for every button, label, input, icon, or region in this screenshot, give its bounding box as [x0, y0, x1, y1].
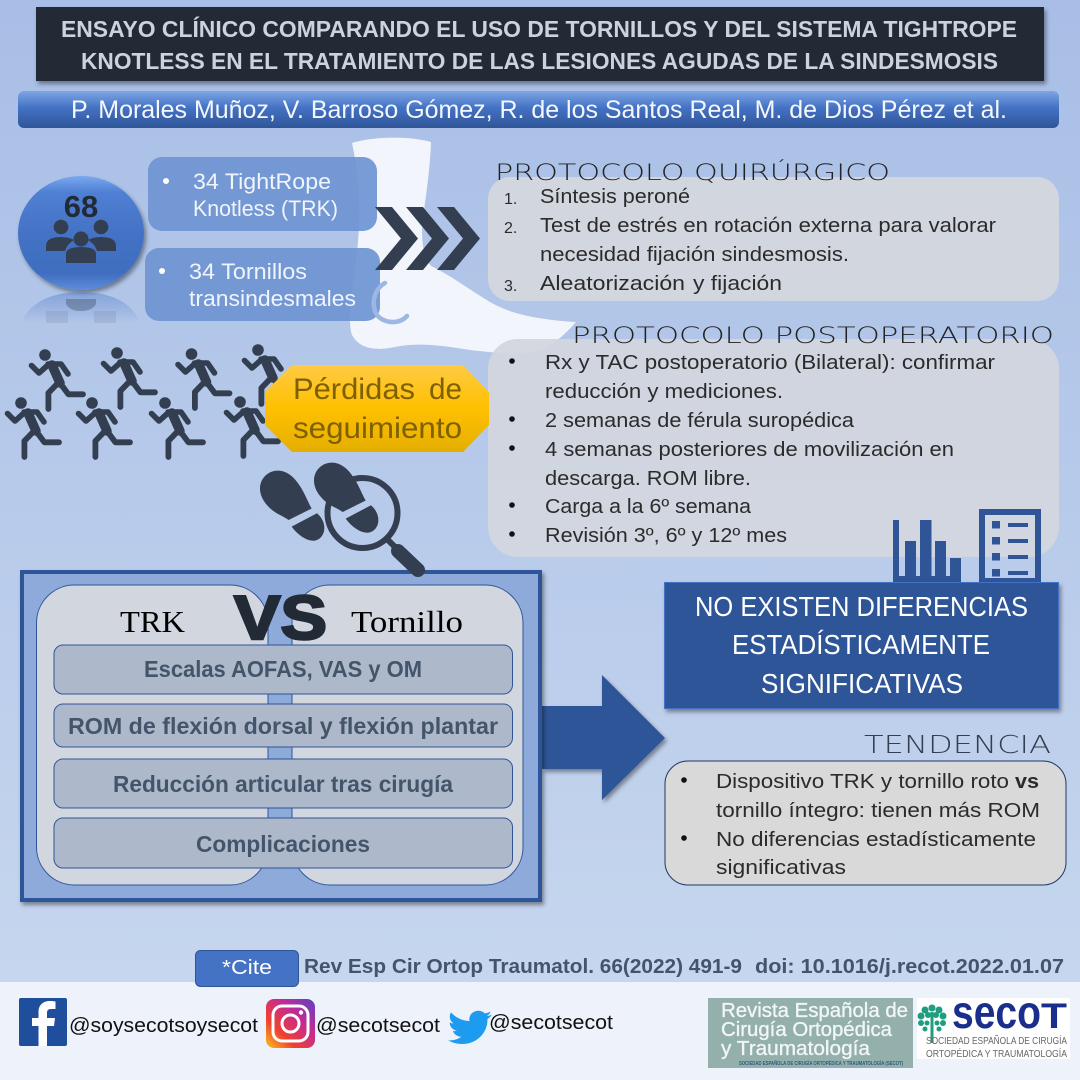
arrow: to conclusion	[542, 675, 665, 800]
icon: patients circle 68	[18, 176, 144, 323]
list: surgical steps: necesidad fijación sindesmosis.	[540, 244, 849, 266]
row: complications	[54, 818, 512, 868]
list: postoperative steps: Revisión 3º, 6º y 12º mes	[545, 525, 787, 547]
list: postoperative steps: 2 semanas de férula suropédica	[545, 410, 855, 432]
list: postoperative steps	[509, 352, 995, 547]
icon: instagram	[266, 999, 315, 1048]
panel: trend: tornillo íntegro: tienen más ROM	[716, 800, 1040, 822]
row: joint reduction: Reducción articular tras cirugía	[113, 771, 453, 797]
icon: facebook	[19, 998, 67, 1046]
handle: facebook: @soysecotsoysecot	[69, 1015, 258, 1037]
list: surgical steps: y fijación	[693, 273, 782, 295]
panel: conclusion	[664, 582, 1058, 708]
panel: TRK group: 34 TightRope	[193, 169, 331, 194]
authors bar	[18, 91, 1059, 128]
callout: lost to follow-up: seguimiento	[293, 412, 462, 445]
icon: twitter	[448, 1011, 492, 1044]
panel: trend: vs	[1015, 771, 1039, 793]
title: KNOTLESS EN EL TRATAMIENTO DE LAS LESIONES AGUDAS DE LA SINDESMOSIS	[81, 48, 998, 74]
row: complications: Complicaciones	[196, 831, 370, 857]
list: postoperative steps: 4 semanas posteriores de movilización en	[545, 439, 954, 461]
panel: conclusion: SIGNIFICATIVAS	[761, 668, 963, 699]
label: TRK: TRK	[120, 604, 186, 639]
button: cite: *Cite	[222, 957, 272, 979]
logo: journal: SOCIEDAD ESPAÑOLA DE CIRUGÍA ORTOPÉDICA Y TRAUMATOLOGÍA (SECOT)	[739, 1059, 903, 1067]
column: screw	[292, 585, 523, 885]
heading: trend: TENDENCIA	[864, 730, 1051, 759]
logo: journal: Cirugía Ortopédica	[721, 1019, 893, 1041]
handle: instagram: @secotsecot	[316, 1015, 440, 1037]
logo: journal: Revista Española de	[721, 1000, 908, 1022]
list: postoperative steps: Carga a la 6º semana	[545, 496, 752, 518]
list: postoperative steps: descarga. ROM libre.	[545, 468, 751, 490]
panel: trend	[665, 761, 1066, 885]
logo: SECOT	[917, 986, 1070, 1060]
panel: conclusion: ESTADÍSTICAMENTE	[732, 629, 990, 660]
button: cite	[196, 950, 298, 986]
panel: screw group: 34 Tornillos	[189, 259, 307, 284]
logo: SECOT: seco	[952, 986, 1041, 1038]
callout: lost to follow-up: de	[429, 373, 462, 406]
panel: trend: significativas	[716, 857, 846, 879]
icon: foot silhouette	[350, 138, 576, 353]
title: ENSAYO CLÍNICO COMPARANDO EL USO DE TORNILLOS Y DEL SISTEMA TIGHTROPE	[61, 15, 1017, 42]
icon: bar chart	[893, 520, 961, 582]
panel: conclusion: NO EXISTEN DIFERENCIAS	[695, 591, 1028, 622]
label: VS: VS	[234, 584, 327, 653]
row: ROM	[54, 704, 512, 747]
list: surgical steps	[504, 186, 996, 295]
icon: document list	[979, 509, 1041, 584]
icon: footprints and magnifier	[252, 455, 418, 570]
logo: journal: y Traumatología	[721, 1038, 871, 1060]
authors bar: P. Morales Muñoz, V. Barroso Gómez, R. de los Santos Real, M. de Dios Pérez et al.	[71, 96, 1007, 124]
panel: TRK group	[148, 157, 377, 231]
citation	[304, 956, 1064, 978]
list: surgical steps: 1.	[504, 191, 517, 208]
row: ROM: ROM de flexión dorsal y flexión plantar	[68, 713, 498, 739]
callout: lost to follow-up	[265, 365, 489, 452]
panel: screw group: transindesmales	[189, 286, 356, 311]
row: joint reduction	[54, 759, 512, 808]
row: scales: Escalas AOFAS, VAS y OM	[144, 656, 422, 682]
callout: lost to follow-up: Pérdidas	[293, 373, 415, 406]
row: scales	[54, 645, 512, 694]
logo: journal	[708, 998, 913, 1068]
icon: tree	[918, 1004, 946, 1043]
label: Tornillo: Tornillo	[351, 604, 463, 639]
panel: postoperative protocol	[488, 324, 1059, 557]
list: surgical steps: Test de estrés en rotación externa para valorar	[540, 215, 996, 237]
panel: trend: No diferencias estadísticamente	[716, 829, 1036, 851]
panel: comparison TRK vs screw	[22, 572, 540, 900]
citation: doi: 10.1016/j.recot.2022.01.07	[755, 956, 1064, 978]
column: TRK	[36, 585, 268, 885]
icon: runners	[8, 344, 296, 457]
list: surgical steps: 3.	[504, 278, 517, 295]
list: postoperative steps: reducción y mediciones.	[545, 381, 783, 403]
heading: surgical protocol: PROTOCOLO QUIRÚRGICO	[495, 160, 890, 186]
list: surgical steps: Síntesis peroné	[540, 186, 690, 208]
handle: twitter: @secotsecot	[489, 1012, 613, 1034]
arrow: triple chevron	[375, 207, 480, 270]
logo: SECOT: T	[1041, 997, 1067, 1036]
citation: Rev Esp Cir Ortop Traumatol. 66(2022) 491-9	[304, 956, 742, 978]
list: surgical steps: Aleatorización	[540, 273, 685, 295]
list: surgical steps: 2.	[504, 220, 517, 237]
title	[36, 7, 1044, 81]
icon: ankle bone arc	[374, 283, 407, 322]
footer band	[0, 982, 1080, 1080]
panel: TRK group: Knotless (TRK)	[193, 196, 338, 221]
panel: screw group	[145, 248, 380, 321]
panel: surgical protocol	[488, 160, 1059, 301]
list: postoperative steps: Rx y TAC postoperatorio (Bilateral): confirmar	[545, 352, 995, 374]
panel: trend: Dispositivo TRK y tornillo roto	[716, 771, 1009, 793]
heading: postoperative protocol: PROTOCOLO POSTOPERATORIO	[572, 324, 1054, 349]
icon: patients circle 68: 68	[64, 189, 98, 224]
